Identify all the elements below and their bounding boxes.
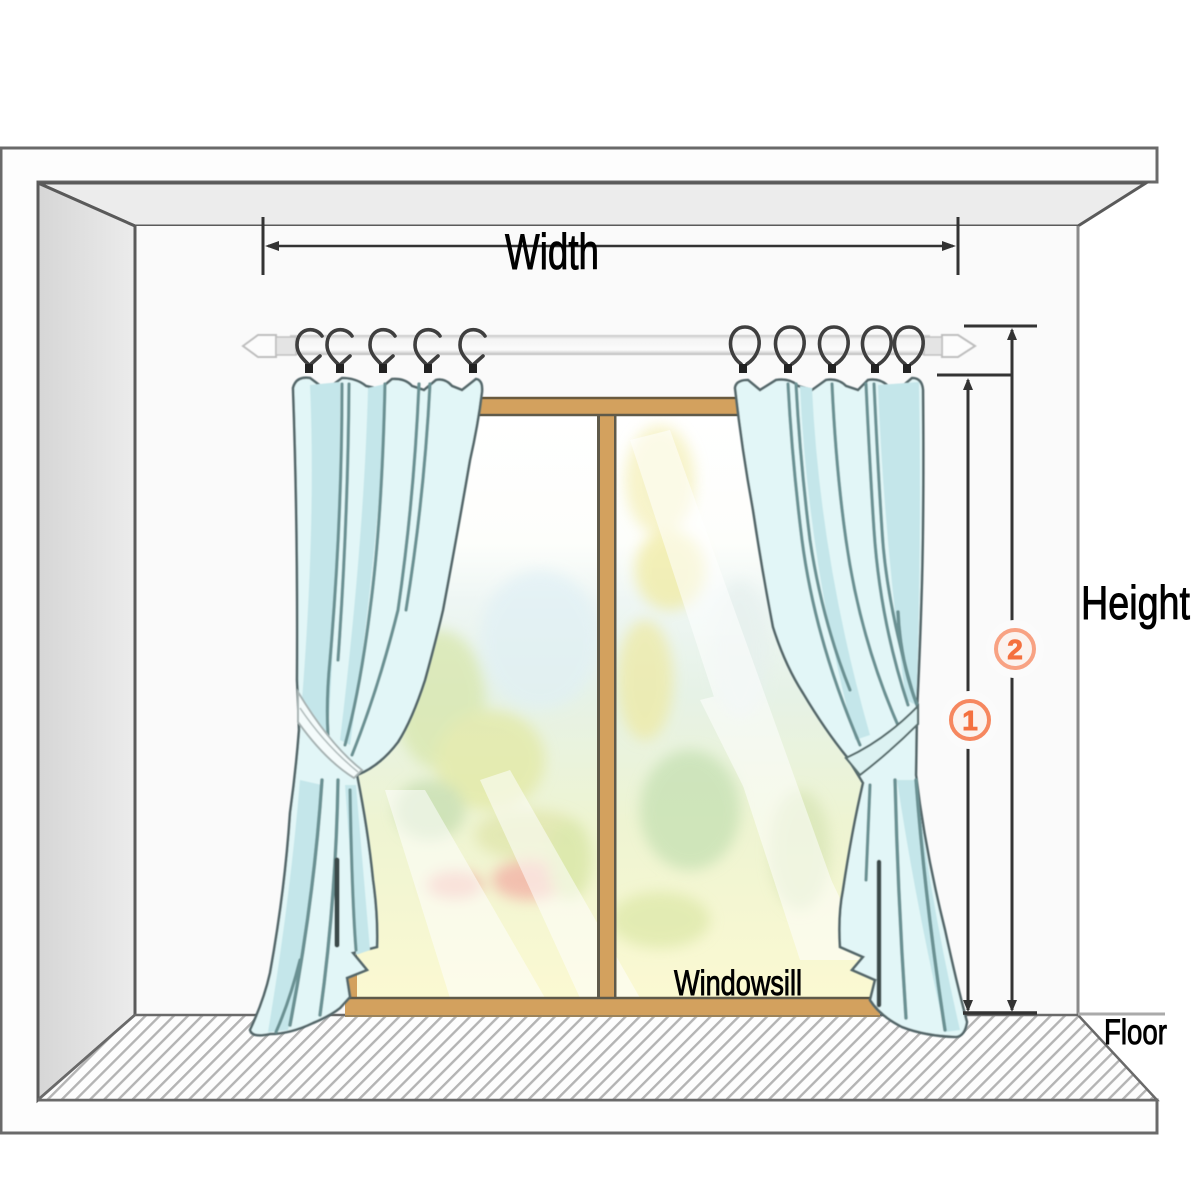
marker 2: 2 [1007, 634, 1023, 665]
window [345, 398, 880, 1017]
floor [38, 1015, 1157, 1100]
ceiling [38, 183, 1146, 226]
height dimension 1 [937, 375, 1012, 1012]
marker 2 [986, 620, 1044, 678]
left wall [38, 183, 135, 1100]
right tieback [846, 706, 918, 775]
curtain rings [297, 327, 923, 364]
room outline [1, 148, 1165, 1133]
left tieback [298, 692, 362, 778]
back wall [135, 226, 1078, 1015]
windowsill label: Windowsill [674, 964, 802, 1003]
right curtain shaded bands [800, 382, 960, 1032]
left curtain shaded bands [268, 382, 385, 1032]
width label: Width [505, 224, 599, 280]
mullion [597, 402, 616, 1014]
left curtain folds [276, 384, 430, 1032]
marker 1: 1 [962, 705, 978, 736]
right curtain folds [788, 384, 945, 1030]
left curtain [250, 378, 482, 1035]
height dimension 2 [963, 326, 1037, 1013]
window glass [357, 415, 880, 998]
floor label: Floor [1104, 1013, 1167, 1052]
right curtain [735, 378, 967, 1037]
marker 1 [941, 691, 999, 749]
curtain rod [243, 335, 975, 357]
width dimension arrow [263, 217, 958, 275]
ring clips [305, 364, 911, 373]
